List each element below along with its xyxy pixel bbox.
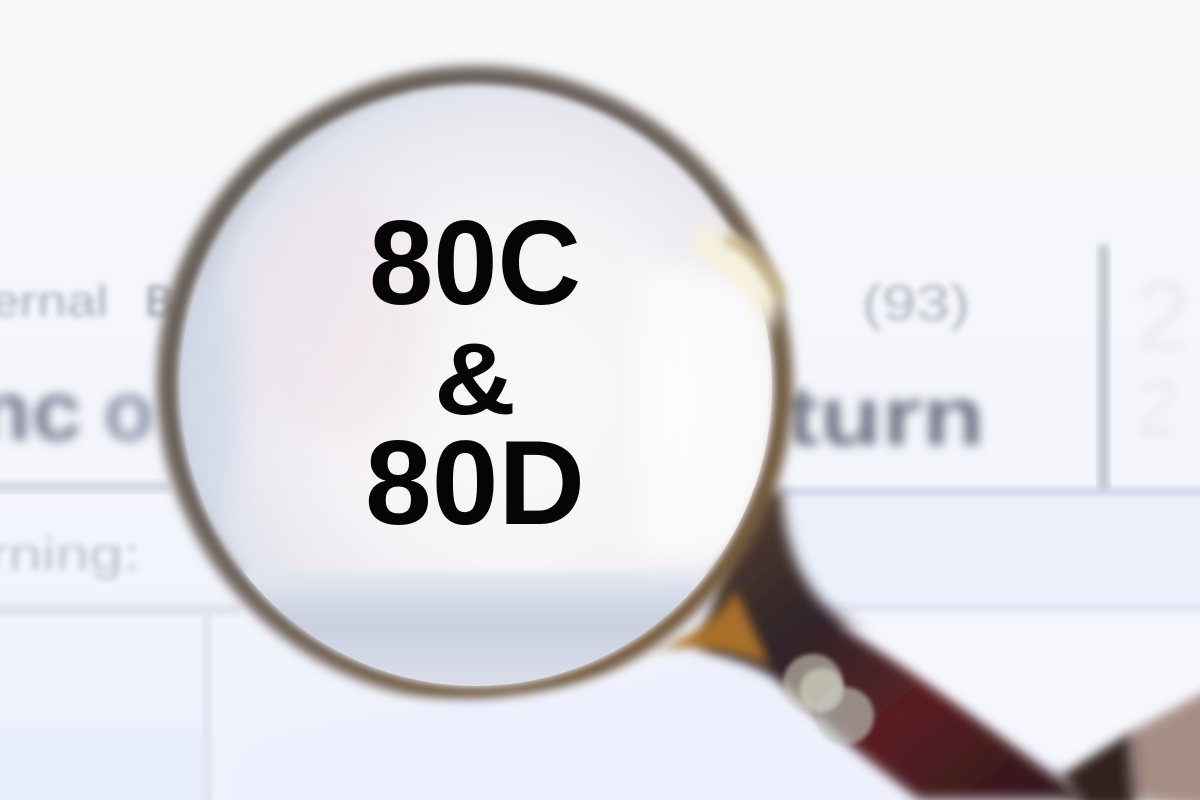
blurred form text bbox=[0, 260, 1191, 580]
title: 80C & 80D: 80C bbox=[369, 196, 581, 330]
blurred form text: o bbox=[103, 364, 154, 458]
blurred form text: B bbox=[145, 277, 174, 326]
magnifier handle bbox=[650, 490, 1200, 800]
blurred form text: turn bbox=[785, 369, 985, 463]
foreground white blur, lower centre bbox=[225, 657, 918, 800]
lens flare circles bbox=[783, 654, 874, 745]
title: 80C & 80D: & bbox=[434, 322, 516, 436]
blurred form text: 2 bbox=[1135, 363, 1180, 452]
blurred form text: (93) bbox=[862, 275, 970, 331]
white paper wedge lower right bbox=[838, 622, 1200, 768]
magnifier ring bbox=[169, 78, 781, 690]
blurred form text: 2 bbox=[1135, 260, 1191, 372]
title: 80C & 80D: 80D bbox=[365, 416, 585, 550]
lens bbox=[150, 85, 800, 712]
title: 80C & 80D bbox=[365, 196, 585, 550]
